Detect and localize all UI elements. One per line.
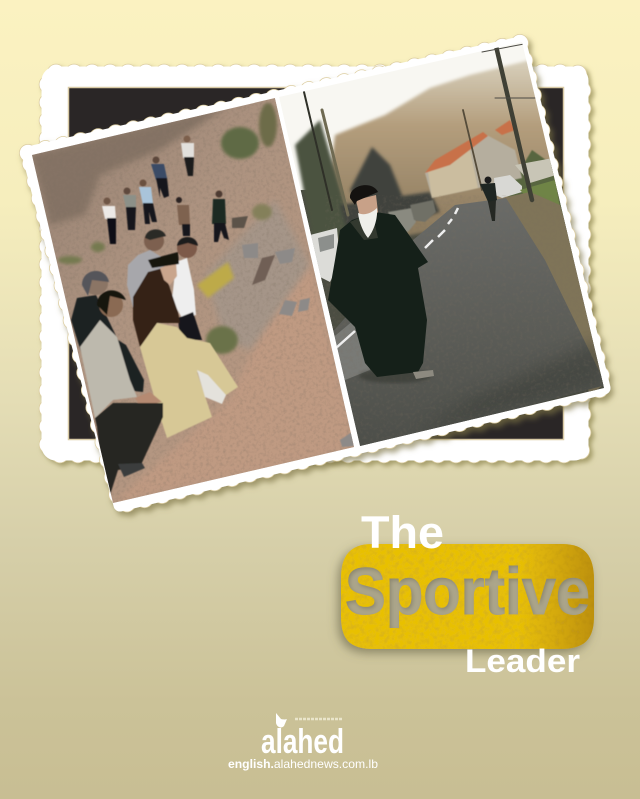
road surface: [330, 198, 606, 450]
word: Sportive: Sportive: [345, 554, 590, 628]
photo: road walk: [279, 42, 604, 446]
telegraph poles: [304, 44, 535, 215]
hillside ground: [20, 90, 365, 510]
man in pale shirt: [80, 290, 163, 495]
logo wordmark: alahed: [261, 723, 344, 761]
grass verge: [520, 180, 560, 205]
road markings: [336, 208, 458, 348]
seated cleric cloak: [133, 268, 180, 347]
seated cleric leg: [197, 370, 226, 404]
white car near house: [494, 175, 522, 198]
logo block: [228, 713, 378, 771]
house: [425, 120, 522, 198]
road shading: [454, 338, 604, 422]
divider strip between photos: [275, 97, 360, 447]
icon: bird: [276, 713, 287, 727]
bushes: [58, 103, 277, 354]
website address: english.alahednews.com.lb: [228, 757, 378, 771]
ground texture: [51, 100, 350, 502]
photo: hillside walk: [20, 90, 365, 510]
white wall: [515, 158, 556, 183]
man in grey shirt: [126, 228, 166, 308]
parked grey cars: [388, 200, 436, 232]
seated cleric robe: [140, 323, 238, 438]
man in white shirt: [172, 237, 202, 340]
grey stony band: [214, 206, 309, 348]
man in black cloak: [328, 185, 434, 383]
panel: front scalloped frame: [28, 43, 604, 505]
distant men: [102, 136, 229, 244]
rocks: [232, 216, 354, 447]
word: Leader: Leader: [465, 643, 580, 679]
shoes: [413, 370, 434, 379]
logo tagline mark: [295, 718, 343, 720]
dark trees: [295, 120, 440, 240]
man in dark jacket: [71, 271, 144, 392]
autumn treeline: [320, 60, 560, 250]
sky: [279, 42, 526, 190]
face and beard: [356, 195, 378, 238]
lower sandy slope: [113, 260, 354, 503]
rocky cliff: [32, 105, 230, 225]
dark inner panel of back frame: [68, 88, 564, 440]
gravel verge: [503, 192, 610, 395]
yellow textured pill: [341, 544, 594, 649]
title block: [341, 507, 594, 679]
parked white car: [310, 228, 340, 282]
word: The: The: [361, 507, 444, 558]
meadow right: [505, 150, 575, 260]
road texture: [325, 195, 610, 455]
road left strip: [334, 322, 370, 380]
turban: [350, 185, 378, 205]
panel: back scalloped frame: [48, 73, 582, 454]
photo base below skyline: [300, 190, 604, 446]
distant walker: [480, 176, 497, 221]
seated cleric face and turban: [148, 252, 179, 285]
foreground men: [71, 229, 238, 495]
